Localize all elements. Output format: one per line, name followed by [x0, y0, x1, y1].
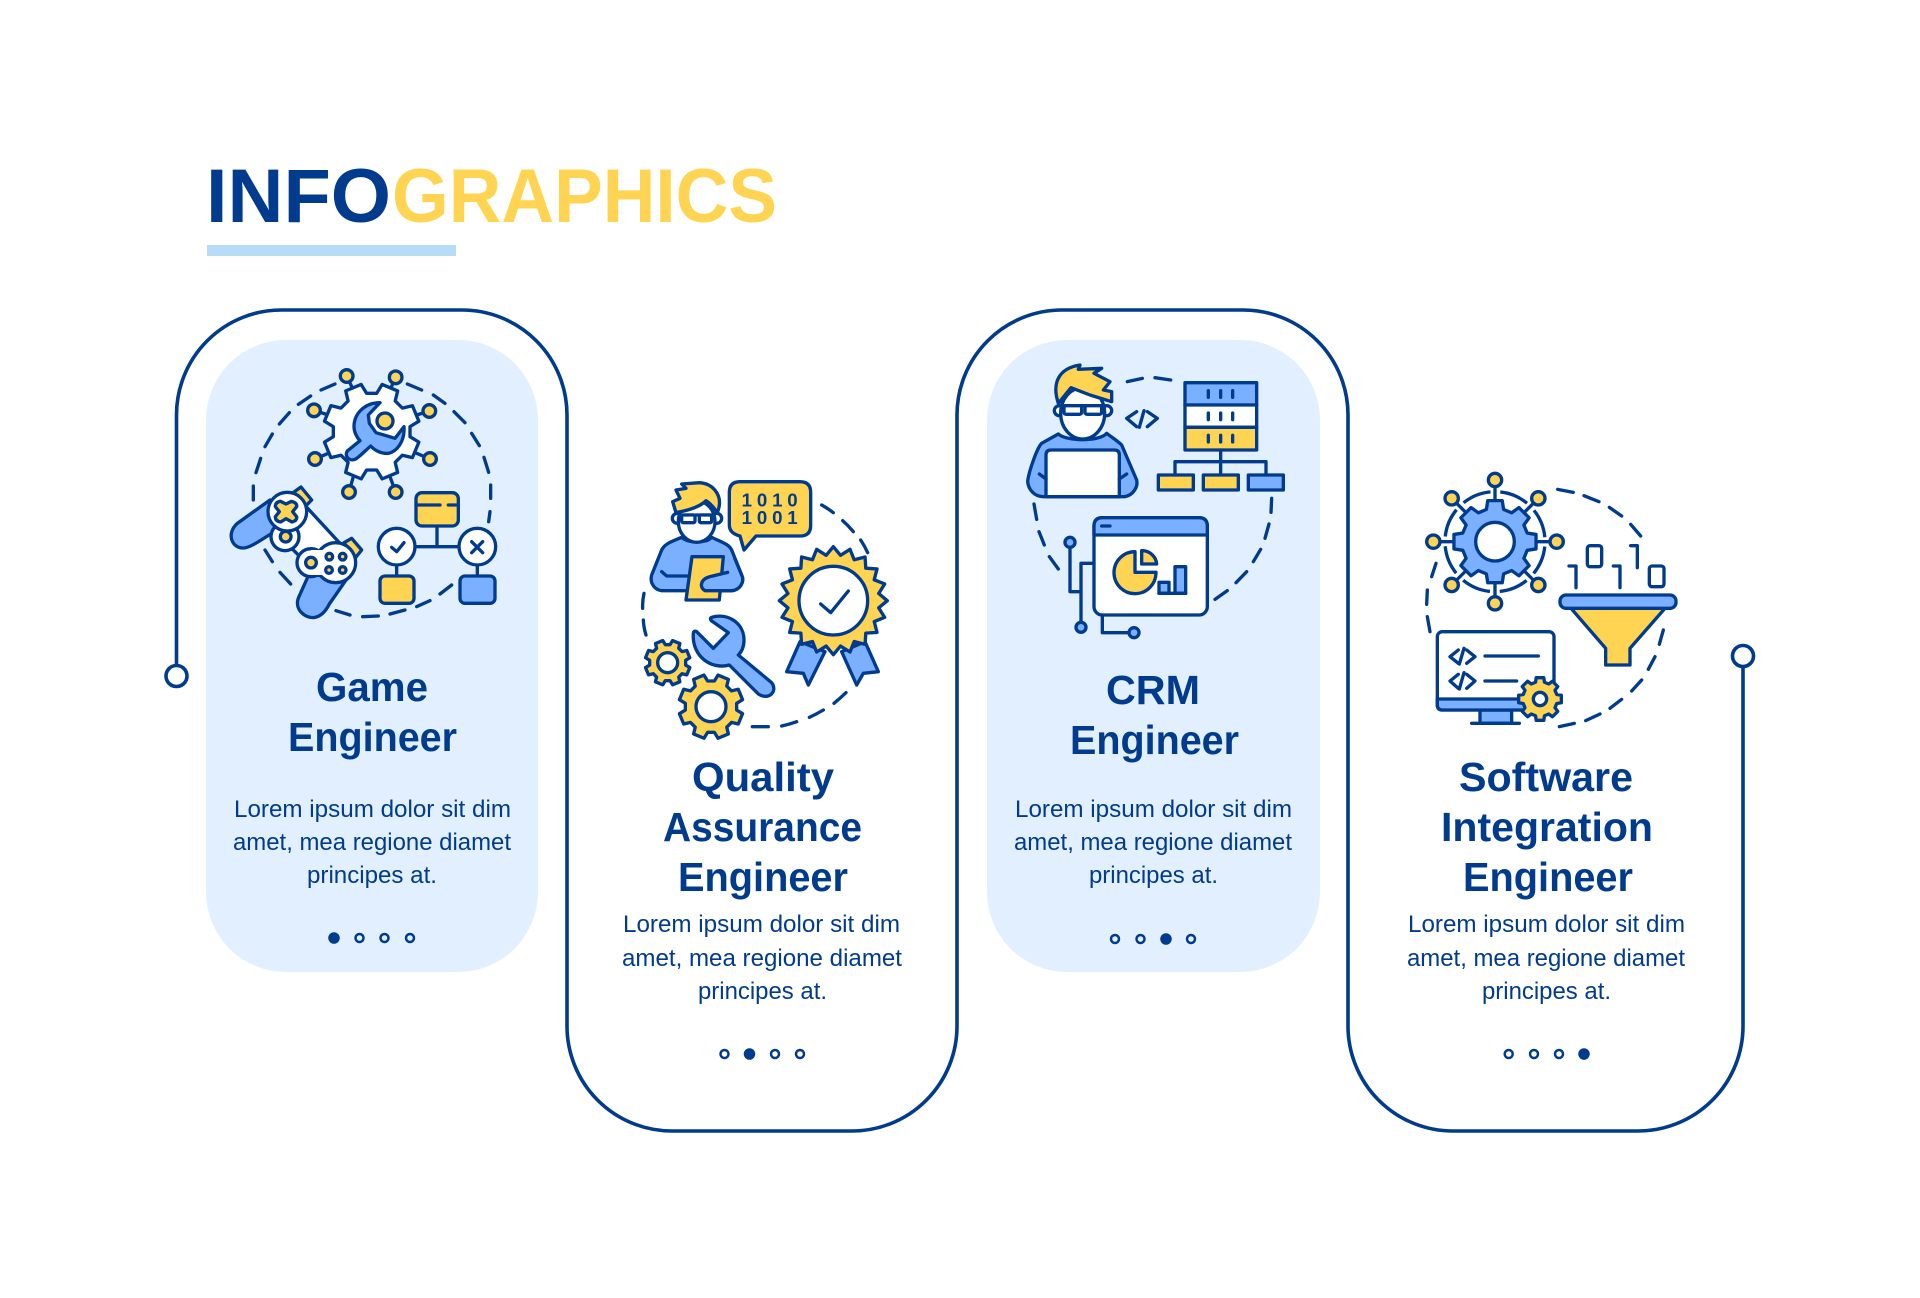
heading	[1070, 667, 1239, 763]
icon: CRM engineering	[1028, 365, 1283, 638]
body text: principes at.	[698, 978, 827, 1005]
body text: principes at.	[1089, 862, 1218, 889]
body text: principes at.	[1482, 978, 1611, 1005]
step dots	[1111, 934, 1195, 944]
heading: CRM	[1106, 667, 1200, 713]
icon: quality assurance: 1010	[742, 490, 798, 511]
heading: Engineer	[1070, 717, 1239, 763]
title underline	[207, 245, 456, 256]
body text: Lorem ipsum dolor sit dim	[1408, 911, 1685, 938]
body text: amet, mea regione diamet	[622, 945, 902, 972]
body text: amet, mea regione diamet	[1014, 829, 1292, 856]
icon: game engineering	[231, 369, 496, 618]
panel: Game Engineer	[206, 340, 538, 972]
body text: Lorem ipsum dolor sit dim	[1015, 796, 1292, 823]
panel: Quality Assurance Engineer	[622, 482, 902, 1058]
heading: Engineer	[288, 714, 457, 760]
heading: Software	[1459, 754, 1633, 800]
heading	[663, 754, 862, 900]
title	[206, 154, 777, 239]
panel background	[206, 340, 538, 972]
heading: Assurance	[663, 804, 862, 850]
icon: quality assurance: 1001	[742, 507, 798, 528]
body text: amet, mea regione diamet	[233, 829, 511, 856]
heading: Engineer	[678, 854, 848, 900]
body text: amet, mea regione diamet	[1407, 945, 1685, 972]
heading	[1441, 754, 1653, 900]
panel background	[987, 340, 1320, 972]
body text: Lorem ipsum dolor sit dim	[623, 911, 900, 938]
title: INFO	[206, 154, 391, 239]
panel: CRM Engineer	[987, 340, 1320, 972]
step dots	[1505, 1050, 1588, 1058]
heading: Game	[316, 664, 428, 710]
heading: Integration	[1441, 804, 1653, 850]
body text	[622, 911, 902, 1005]
body text: Lorem ipsum dolor sit dim	[234, 796, 511, 823]
step dots	[720, 1050, 804, 1058]
heading: Quality	[692, 754, 834, 800]
body text: principes at.	[307, 862, 437, 889]
heading: Engineer	[1463, 854, 1633, 900]
connecting outline	[166, 310, 1754, 1131]
title: GRAPHICS	[392, 154, 777, 239]
body text	[1407, 911, 1685, 1005]
step dots	[330, 934, 414, 942]
icon: software integration	[1427, 473, 1676, 727]
heading	[288, 664, 457, 760]
panel: Software Integration Engineer	[1407, 473, 1685, 1058]
body text	[1014, 796, 1292, 889]
body text	[233, 796, 511, 889]
icon: quality assurance	[638, 482, 887, 748]
